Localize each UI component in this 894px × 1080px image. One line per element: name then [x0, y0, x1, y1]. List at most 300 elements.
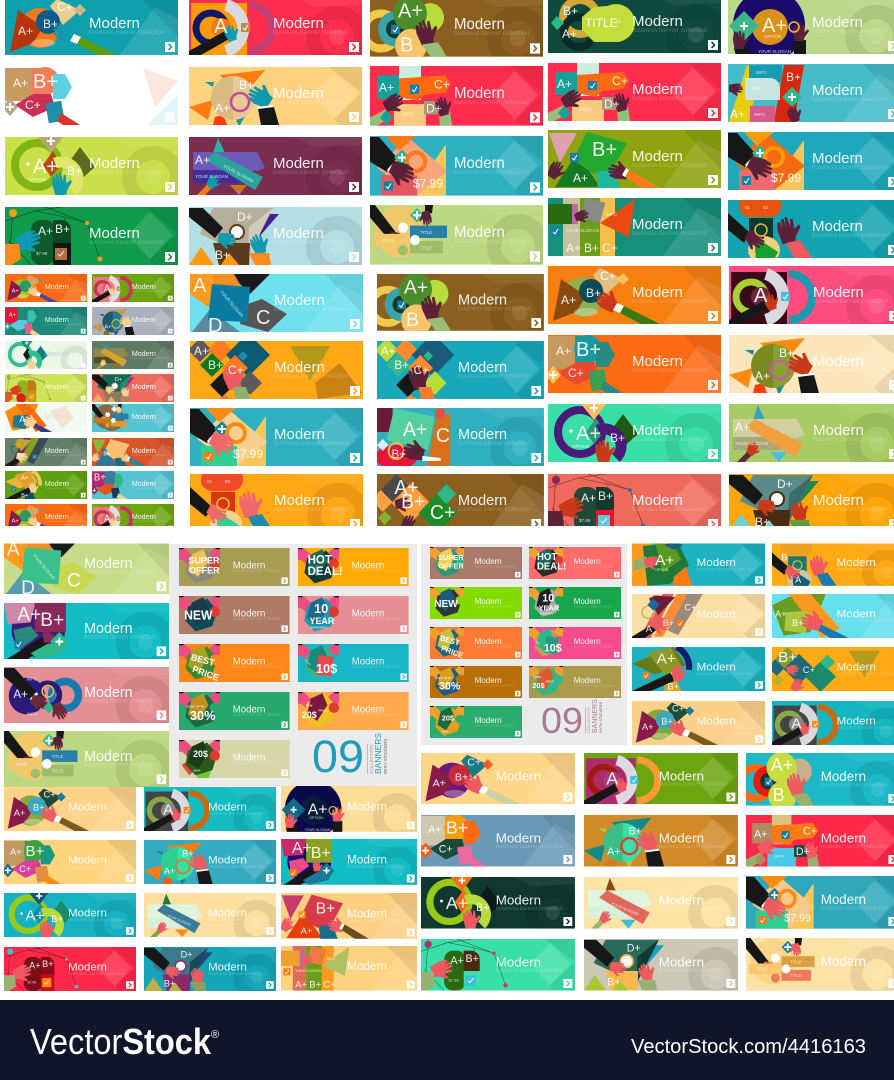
button	[888, 109, 894, 119]
heading: Modern	[233, 752, 265, 763]
art: A+	[14, 689, 28, 701]
image url: VectorStock.com/4416163	[631, 1036, 866, 1058]
heading: business banner collection	[574, 683, 614, 687]
art: D+	[426, 101, 442, 115]
button	[888, 41, 894, 51]
banner: cyan olive	[772, 594, 894, 638]
heading	[632, 148, 708, 169]
art: $7.99	[233, 447, 263, 461]
heading: business banner collection	[132, 389, 168, 393]
heading: business banner collection	[821, 783, 888, 789]
heading: business banner collection	[233, 712, 282, 717]
heading: business banner collection	[45, 419, 81, 423]
art	[193, 138, 265, 195]
art: 10	[542, 592, 554, 604]
art	[733, 405, 805, 462]
heading	[273, 155, 349, 176]
button	[888, 917, 894, 926]
art	[632, 539, 692, 586]
art: A+	[21, 476, 29, 482]
heading: Modern	[89, 155, 140, 172]
heading: Modern	[45, 316, 69, 324]
heading: business banner collection	[347, 864, 406, 870]
sticker banner: 10 year warranty	[298, 596, 409, 634]
heading: Modern	[821, 769, 866, 784]
art	[558, 404, 638, 463]
heading: Modern	[233, 608, 265, 619]
banner: pale green option	[728, 0, 894, 54]
art	[729, 65, 804, 124]
banner: teal diamonds	[375, 333, 544, 399]
bottom group, fourth column	[418, 753, 575, 991]
art	[767, 647, 836, 694]
button	[614, 652, 619, 657]
heading: Modern	[574, 676, 601, 685]
small banner: orange triangle 2	[5, 504, 87, 532]
art: C+	[684, 603, 696, 613]
heading	[574, 557, 614, 568]
heading	[632, 15, 707, 32]
heading	[68, 908, 126, 923]
art	[529, 666, 563, 696]
art	[548, 472, 646, 532]
heading	[454, 18, 529, 35]
heading	[352, 704, 401, 717]
small banner: pale orange	[5, 404, 87, 432]
banner: cream navy circle	[281, 780, 417, 837]
art	[2, 67, 80, 125]
heading	[837, 716, 894, 731]
art: A	[7, 539, 20, 560]
banner: orange arrows	[545, 335, 721, 393]
heading: business banner collection	[208, 917, 266, 923]
art: 10$	[316, 661, 338, 676]
heading: Modern	[45, 413, 69, 421]
art: A+	[10, 847, 22, 857]
heading	[574, 597, 614, 608]
button	[755, 681, 763, 689]
heading	[496, 768, 563, 788]
heading: business banner collection	[45, 289, 81, 293]
heading	[837, 662, 894, 677]
art: A+	[195, 153, 210, 167]
bottom group, first column	[2, 787, 136, 991]
heading: business banner collection	[496, 906, 563, 912]
button	[708, 519, 718, 529]
banner: teal price salmon	[190, 408, 363, 467]
button	[889, 311, 894, 321]
banner: teal triangle ABC	[5, 0, 178, 55]
art: A+	[33, 156, 58, 178]
heading: Modern	[132, 480, 156, 488]
heading: Modern	[352, 608, 384, 619]
art: YOUR SLOGAN	[566, 228, 599, 233]
heading: Modern	[496, 893, 541, 908]
heading: business banner collection	[45, 322, 81, 326]
heading: Modern	[273, 15, 324, 32]
banner: orange diamonds	[188, 333, 363, 399]
art	[548, 63, 632, 121]
heading: business banner collection	[208, 971, 266, 977]
button	[266, 981, 274, 989]
heading: Modern	[347, 906, 387, 920]
heading: business banner collection	[821, 906, 888, 912]
art	[529, 587, 563, 617]
art: C+	[19, 864, 31, 874]
banner: orange plane	[729, 474, 894, 538]
banner: yellow triangle	[632, 701, 765, 745]
button	[266, 821, 274, 829]
art	[370, 0, 447, 57]
heading	[347, 799, 406, 817]
button	[888, 855, 894, 864]
button	[81, 296, 86, 301]
heading	[89, 17, 164, 34]
heading: Modern	[475, 557, 502, 566]
heading: business banner collection	[208, 811, 266, 817]
heading: business banner collection	[574, 604, 614, 608]
art	[729, 338, 819, 395]
heading: Modern	[496, 955, 541, 970]
banner: teal price	[370, 136, 543, 197]
heading: business banner collection	[837, 566, 894, 572]
heading: Modern	[632, 422, 683, 439]
heading: Modern	[352, 656, 384, 667]
heading: Modern	[659, 893, 704, 908]
art	[421, 937, 508, 991]
heading: business banner collection	[458, 373, 531, 380]
heading: business banner collection	[273, 239, 349, 246]
heading: Modern	[632, 13, 683, 30]
art	[298, 596, 339, 631]
small banner: rust gem	[91, 438, 174, 466]
heading: Modern	[697, 609, 736, 621]
heading: business banner collection	[454, 30, 530, 37]
art: C+	[602, 241, 618, 255]
panel: nine sticker banners, orange hands	[421, 544, 627, 745]
heading: Modern	[45, 383, 69, 391]
art: A+	[12, 288, 19, 294]
heading: Modern	[697, 662, 736, 674]
button	[400, 673, 407, 680]
art: B+	[215, 248, 230, 262]
banner: pink rings	[4, 667, 169, 729]
art	[375, 333, 454, 399]
art: A+	[38, 224, 53, 238]
heading: business banner collection	[632, 506, 708, 513]
heading: Modern	[837, 716, 876, 728]
heading: Modern	[475, 597, 502, 606]
art: WARRANTY	[540, 613, 554, 616]
heading: business banner collection	[454, 169, 530, 176]
art	[584, 818, 664, 868]
bottom group, sixth column	[741, 752, 894, 996]
banner: red square	[746, 815, 894, 867]
heading	[233, 560, 282, 573]
heading: Modern	[475, 676, 502, 685]
art: TITLE	[757, 967, 768, 972]
art: A+	[17, 604, 41, 625]
art	[92, 404, 128, 431]
heading: Modern	[812, 150, 863, 167]
art	[588, 878, 652, 929]
art: B+	[576, 339, 601, 361]
button	[889, 449, 894, 459]
art: C+	[414, 364, 429, 377]
banner: teal olive triangle	[632, 647, 765, 692]
art: HOT	[537, 552, 557, 563]
art	[370, 136, 447, 197]
heading: business banner collection	[659, 844, 726, 850]
heading: Modern	[132, 350, 156, 358]
art: $7.99	[579, 518, 591, 523]
heading: Modern	[89, 225, 140, 242]
heading	[132, 350, 168, 360]
art	[188, 333, 270, 399]
heading: Modern	[837, 662, 876, 674]
art	[375, 408, 450, 469]
banner: cyan slogan square	[190, 274, 363, 337]
art	[179, 740, 220, 775]
button	[708, 40, 718, 50]
art: YOUR SLOGAN	[305, 828, 331, 832]
banner: coral network	[548, 472, 721, 532]
art: A+	[104, 325, 112, 331]
art	[370, 66, 454, 126]
heading	[496, 893, 563, 912]
small banner: orange triangle	[5, 274, 87, 302]
button	[563, 979, 572, 988]
heading: Modern	[697, 557, 736, 569]
heading: business banner collection	[632, 95, 708, 102]
button	[81, 396, 86, 401]
heading	[632, 83, 707, 100]
art: D+	[237, 210, 253, 224]
art: B	[400, 34, 413, 57]
heading	[454, 155, 530, 176]
heading: Modern	[496, 768, 541, 783]
button	[530, 112, 540, 123]
art	[190, 274, 287, 337]
heading	[352, 608, 401, 621]
heading: business banner collection	[659, 906, 726, 912]
art: A+	[404, 276, 428, 299]
heading: Modern	[659, 831, 704, 846]
banner: yellow maroon triangle	[4, 787, 136, 831]
heading: Modern	[454, 155, 505, 172]
heading: business banner collection	[812, 232, 888, 239]
heading: Modern	[458, 493, 507, 509]
heading	[89, 85, 165, 106]
art	[728, 194, 812, 264]
art: B+	[42, 959, 54, 969]
button	[515, 731, 520, 736]
footer bar	[0, 1000, 894, 1080]
art: B+	[25, 843, 45, 860]
button	[126, 874, 134, 882]
heading	[659, 955, 726, 974]
heading	[574, 637, 614, 648]
banner: teal gray ring	[772, 701, 894, 750]
art: D+	[627, 942, 641, 954]
art: A+	[9, 313, 17, 319]
button	[531, 386, 541, 396]
art: B+	[43, 17, 58, 31]
art: A+	[12, 518, 19, 524]
art	[425, 755, 521, 804]
art: B+	[792, 618, 804, 628]
button	[407, 875, 415, 882]
art	[282, 780, 345, 837]
art	[371, 273, 452, 336]
art: D+	[777, 477, 793, 491]
heading	[45, 316, 81, 326]
art: YOUR SLOGAN	[758, 49, 791, 54]
heading: business banner collection	[496, 782, 563, 788]
art: A+	[762, 15, 787, 37]
heading	[84, 556, 156, 576]
heading: Modern	[45, 283, 69, 291]
art: OFFER	[439, 561, 464, 571]
sticker banner: save up to 30%	[430, 666, 522, 698]
small banner: green ring 2	[92, 504, 174, 532]
heading: Modern	[233, 656, 265, 667]
art: B	[773, 785, 785, 805]
art: WARRANTY	[311, 626, 327, 630]
banner: teal price 2	[728, 132, 894, 191]
button	[81, 426, 86, 431]
art: A	[19, 414, 26, 425]
art: B+	[17, 453, 25, 459]
art: A+	[398, 0, 423, 23]
banner: teal ring lime	[4, 893, 136, 942]
art: B+	[584, 241, 599, 255]
art: A	[754, 285, 768, 307]
heading: Modern	[233, 560, 265, 571]
heading: business banner collection	[475, 604, 515, 608]
heading: Modern	[821, 831, 866, 846]
heading: Modern	[208, 962, 247, 974]
art: C+	[803, 665, 815, 675]
art: B+	[394, 359, 409, 372]
art: 01	[207, 479, 213, 484]
art: A+	[775, 609, 787, 619]
art: 20$	[442, 713, 455, 722]
heading: business banner collection	[475, 723, 515, 727]
registered mark: ®	[211, 1029, 219, 1041]
banner: beige plane	[584, 939, 738, 996]
art	[4, 945, 78, 991]
art: C	[256, 307, 270, 329]
sticker banner: sale 10$	[298, 644, 409, 682]
art: PRICE	[191, 664, 220, 683]
button	[168, 493, 173, 498]
number 09 with caption: WITH STICKERS	[598, 701, 603, 733]
heading: Modern	[208, 908, 247, 920]
art: YOUR SLOGAN	[735, 441, 768, 446]
art	[430, 627, 464, 660]
art: B+	[465, 953, 479, 965]
heading: Modern	[347, 960, 387, 973]
art: A	[214, 16, 228, 38]
heading: Modern	[813, 353, 864, 370]
button	[126, 927, 134, 935]
sticker banner: super offer	[179, 548, 290, 586]
banner: cream magnifier	[729, 335, 894, 395]
art: C+	[672, 704, 684, 714]
art	[728, 132, 805, 191]
art: A	[104, 283, 111, 294]
button	[888, 794, 894, 803]
heading: Modern	[496, 831, 541, 846]
heading: Modern	[45, 513, 69, 521]
button	[350, 319, 360, 329]
banner: teal stripes	[548, 198, 721, 256]
heading: Modern	[233, 704, 265, 715]
art: INFO	[756, 70, 767, 75]
sticker banner: 20$	[430, 706, 522, 738]
art: INFO	[752, 86, 763, 91]
art	[190, 408, 267, 467]
number 09 with caption: 09	[312, 731, 364, 782]
button	[726, 979, 735, 988]
heading	[458, 292, 531, 312]
heading	[821, 954, 888, 974]
heading	[659, 831, 726, 850]
heading: Modern	[458, 292, 507, 308]
heading: Modern	[837, 609, 876, 621]
heading: business banner collection	[454, 99, 530, 106]
heading	[821, 831, 888, 850]
heading: business banner collection	[45, 356, 81, 360]
heading: business banner collection	[837, 725, 894, 731]
art: B+	[239, 78, 254, 92]
button	[515, 652, 520, 657]
heading: business banner collection	[233, 760, 282, 765]
button	[81, 460, 86, 465]
sticker banner: super offer	[430, 547, 522, 579]
art: HOT	[308, 554, 332, 567]
heading: Modern	[274, 426, 325, 443]
heading: Modern	[208, 802, 247, 814]
heading	[84, 685, 156, 705]
heading: business banner collection	[821, 844, 888, 850]
heading	[132, 316, 168, 326]
heading	[273, 225, 349, 246]
button	[708, 108, 718, 118]
heading	[132, 383, 168, 393]
small banner: gray-green ribbon	[92, 341, 174, 369]
banner: ochre magnifier	[584, 815, 738, 868]
heading: Modern	[347, 799, 387, 813]
heading: business banner collection	[347, 918, 406, 924]
art: A+	[381, 345, 395, 358]
button	[530, 182, 540, 193]
heading: Modern	[458, 360, 507, 376]
button	[281, 625, 288, 632]
button	[531, 318, 541, 328]
art: OPTION	[655, 568, 669, 572]
art: OPTION	[572, 444, 589, 449]
art	[632, 594, 703, 638]
art: B+	[94, 473, 106, 484]
banner: red square 2	[548, 63, 721, 121]
art	[553, 268, 660, 324]
heading	[84, 749, 156, 769]
heading: business banner collection	[132, 519, 168, 523]
art: B+	[67, 164, 82, 178]
heading: Modern	[454, 16, 505, 33]
